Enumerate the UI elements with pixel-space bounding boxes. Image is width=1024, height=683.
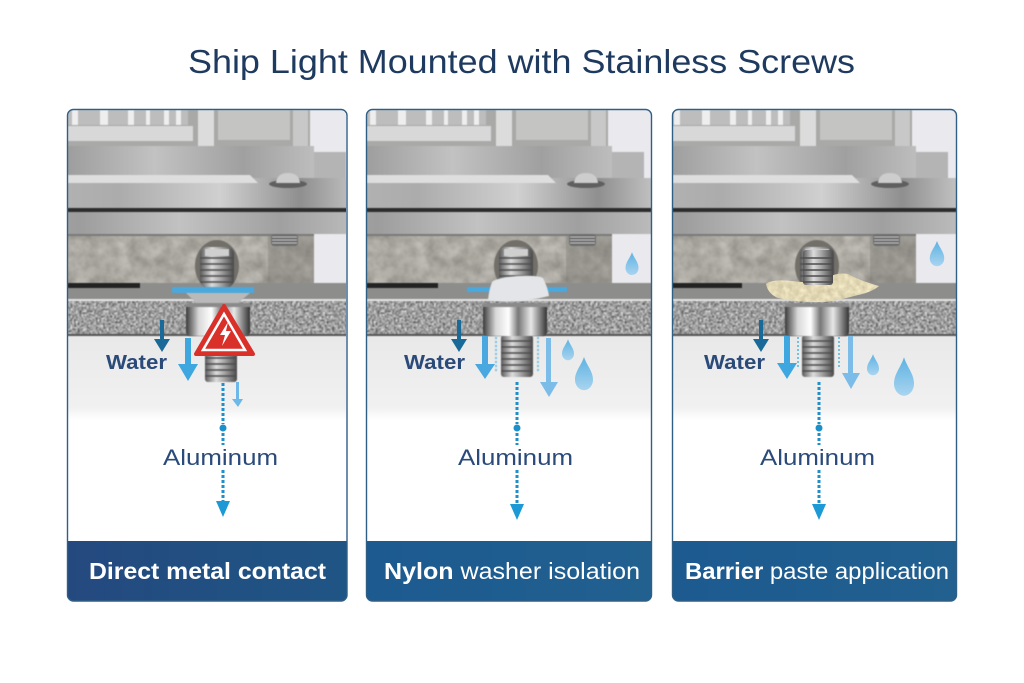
arrow: light water arrow: [178, 338, 198, 381]
photo: light fixture on granite: [367, 110, 651, 412]
photo: light fixture on granite: [68, 110, 346, 412]
arrow: aluminum dotted line: [510, 382, 524, 520]
arrow: light water arrow: [777, 336, 797, 379]
panel: barrier paste application: [672, 108, 958, 602]
arrow: small curved drip: [232, 382, 243, 407]
label: water: Water: [404, 352, 465, 374]
arrow: dark water arrow: [154, 320, 170, 352]
panel: direct metal contact: [66, 108, 348, 602]
arrow: aluminum dotted line: [216, 383, 230, 517]
arrow: dark water arrow: [451, 320, 467, 352]
icon: water drops: [562, 252, 638, 390]
arrow: dark water arrow: [753, 320, 769, 352]
icon: bolt, paste and nut: [766, 240, 879, 377]
label: water: Water: [704, 352, 765, 374]
icon: bolt, washer and nut: [467, 240, 567, 377]
label: aluminum: Aluminum: [760, 445, 875, 470]
footer: barrier paste application: Barrier paste application: [685, 558, 949, 584]
arrow: pale water arrow: [540, 338, 558, 397]
label: aluminum: Aluminum: [458, 445, 573, 470]
footer: barrier paste application: [672, 541, 957, 601]
photo: light fixture on granite: [673, 110, 956, 412]
footer: nylon washer isolation: [366, 541, 652, 601]
label: aluminum: Aluminum: [163, 445, 278, 470]
panel: nylon washer isolation: [366, 108, 652, 602]
icon: bolt and nut: [172, 240, 254, 382]
icon: warning triangle: [196, 306, 253, 354]
title: Ship Light Mounted with Stainless Screws: [188, 43, 855, 80]
footer: nylon washer isolation: Nylon washer isolation: [384, 558, 640, 584]
arrow: light water arrow: [475, 336, 495, 379]
label: water: Water: [106, 352, 167, 374]
footer: direct metal contact: Direct metal contact: [89, 558, 326, 584]
icon: water drops: [867, 241, 944, 396]
footer: direct metal contact: [67, 541, 347, 601]
arrow: aluminum dotted line: [812, 382, 826, 520]
arrow: pale water arrow: [842, 336, 860, 389]
